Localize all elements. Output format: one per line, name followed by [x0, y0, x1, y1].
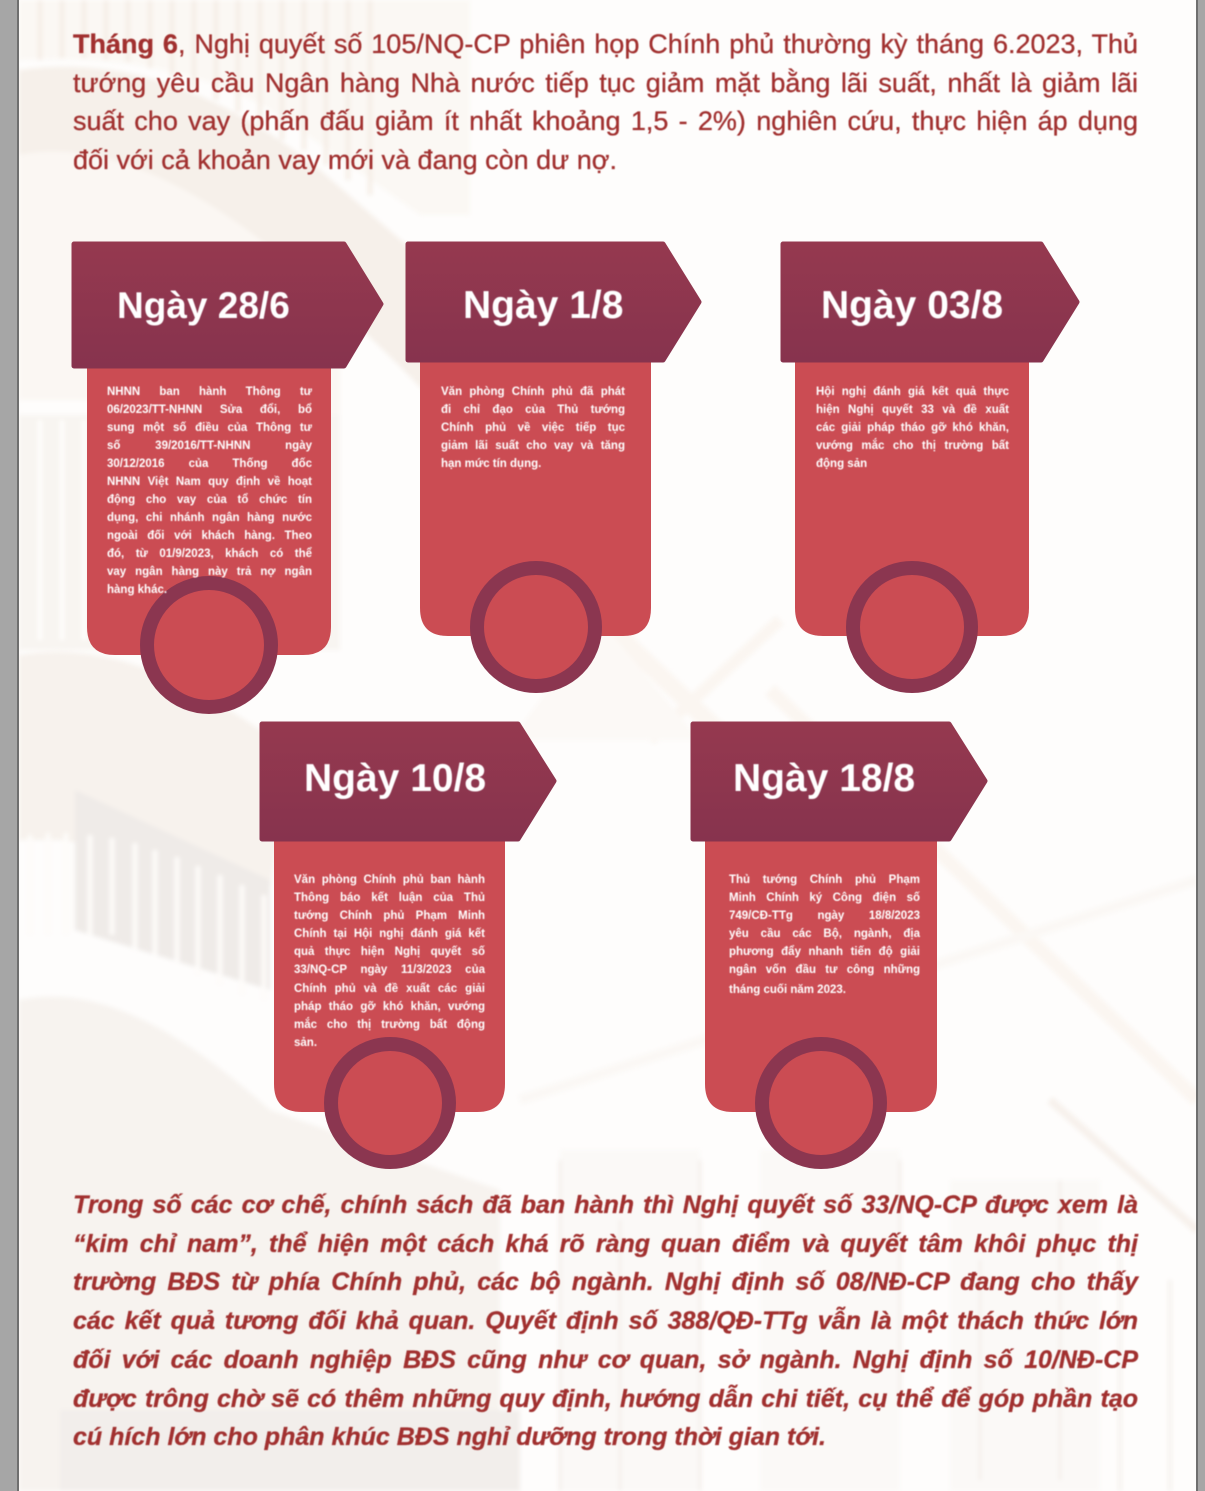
card text — [816, 385, 1010, 470]
closing paragraph — [72, 1191, 1140, 1451]
card: Ngày 10/8 — [260, 722, 556, 1169]
card text — [106, 385, 313, 596]
card text: NHNN ban hành Thông tư — [107, 386, 312, 398]
card text: tướng Chính phủ Phạm Minh — [294, 910, 485, 922]
card text: đó, từ 01/9/2023, khách có thể — [107, 548, 312, 560]
date heading: Ngày 18/8 — [733, 757, 915, 800]
card text: đi chỉ đạo của Thủ tướng — [441, 404, 625, 416]
card text: động sản — [816, 458, 867, 470]
intro paragraph: Tháng 6, Nghị quyết số 105/NQ-CP phiên họp Chính phủ thường kỳ tháng 6.2023, Thủ — [73, 29, 1138, 59]
card text — [293, 873, 486, 1049]
right-hand diagonal mouldings — [520, 560, 1197, 1100]
card text: Thủ tướng Chính phủ Phạm — [729, 874, 920, 886]
card text: Chính tại Hội nghị đánh giá kết — [294, 928, 485, 940]
card text: giảm lãi suất cho vay và tăng — [441, 440, 625, 452]
card text: 06/2023/TT-NHNN Sửa đổi, bổ — [107, 404, 312, 416]
card text: phương đẩy nhanh tiến độ giải — [729, 946, 920, 958]
card text: Chính phủ và đề xuất các giải — [294, 983, 485, 995]
card text: 749/CĐ-TTg ngày 18/8/2023 — [729, 910, 920, 922]
card text: Chính phủ về việc tiếp tục — [441, 422, 625, 434]
card text: Hội nghị đánh giá kết quả thực — [816, 386, 1009, 398]
card text: Minh Chính ký Công điện số — [729, 892, 920, 904]
date banner arrow — [262, 724, 554, 839]
date banner arrow — [693, 724, 985, 839]
date heading: Ngày 03/8 — [821, 284, 1003, 327]
decorative circle — [331, 1044, 449, 1162]
card text: sung một số điều của Thông tư — [107, 422, 312, 434]
card text: dụng, chi nhánh ngân hàng nước — [107, 512, 312, 524]
closing paragraph: các kết quả tương đối khả quan. Quyết định số 388/QĐ-TTg vẫn là một thách thức lớn — [73, 1307, 1138, 1335]
decorative circle — [762, 1044, 880, 1162]
card text: hiện Nghị quyết 33 và đề xuất — [816, 404, 1009, 416]
decorative circle — [853, 568, 971, 686]
intro paragraph — [72, 29, 1138, 176]
card text: số 39/2016/TT-NHNN ngày — [107, 440, 312, 452]
card body — [87, 361, 331, 655]
card text: hàng khác. — [107, 584, 167, 596]
date banner arrow — [74, 244, 381, 366]
closing paragraph: được trông chờ sẽ có thêm những quy định, hướng dẫn chi tiết, cụ thể để góp phần tạo — [73, 1385, 1138, 1413]
card body — [795, 356, 1029, 636]
card body — [705, 836, 937, 1112]
card text: quả thực hiện Nghị quyết số — [294, 946, 485, 958]
card text: hạn mức tín dụng. — [441, 458, 541, 470]
closing paragraph: trường BĐS từ phía Chính phủ, các bộ ngành. Nghị định số 08/NĐ-CP đang cho thấy — [73, 1268, 1138, 1296]
date heading: Ngày 28/6 — [117, 285, 290, 326]
card text: 33/NQ-CP ngày 11/3/2023 của — [294, 964, 485, 976]
intro paragraph: tướng yêu cầu Ngân hàng Nhà nước tiếp tục giảm mặt bằng lãi suất, nhất là giảm lãi — [73, 68, 1138, 98]
closing paragraph: cú hích lớn cho phân khúc BĐS nghỉ dưỡng trong thời gian tới. — [73, 1423, 826, 1451]
card text: Thông báo kết luận của Thủ — [294, 892, 485, 904]
lower balcony sweep — [19, 652, 290, 960]
card: Ngày 18/8 — [690, 722, 988, 1169]
closing paragraph: Trong số các cơ chế, chính sách đã ban hành thì Nghị quyết số 33/NQ-CP được xem là — [73, 1191, 1138, 1219]
closing paragraph: đối với các doanh nghiệp BĐS cũng như cơ quan, sở ngành. Nghị định số 10/NĐ-CP — [73, 1346, 1138, 1374]
card text: NHNN Việt Nam quy định về hoạt — [107, 476, 312, 488]
card text: ngoài đối với khách hàng. Theo — [107, 530, 312, 542]
intro paragraph: đối với cả khoản vay mới và đang còn dư nợ. — [73, 145, 617, 175]
card: Ngày 1/8 — [406, 242, 702, 693]
middle balcony — [19, 415, 340, 650]
lower right windows — [560, 1150, 1100, 1491]
card text: vướng mắc cho thị trường bất — [816, 440, 1009, 452]
card text: vay ngân hàng này trả nợ ngân — [107, 566, 312, 578]
card text: động cho vay của tổ chức tín — [107, 494, 312, 506]
card text: yêu cầu các Bộ, ngành, địa — [729, 928, 920, 940]
card text: Văn phòng Chính phủ đã phát — [441, 386, 625, 398]
decorative circle — [147, 583, 271, 707]
card body — [274, 836, 505, 1112]
card text: các giải pháp tháo gỡ khó khăn, — [816, 422, 1009, 434]
top-left building block — [19, 0, 470, 215]
date banner arrow — [783, 244, 1077, 360]
card: Ngày 03/8 — [780, 242, 1080, 693]
card text: sản. — [294, 1037, 317, 1049]
card text: mắc cho thị trường bất động — [294, 1019, 485, 1031]
card text: tháng cuối năm 2023. — [729, 984, 846, 996]
date heading: Ngày 1/8 — [463, 284, 623, 327]
card text: ngân vốn đầu tư công những — [729, 964, 920, 976]
date banner arrow — [408, 244, 699, 360]
decorative circle — [477, 568, 595, 686]
closing paragraph: “kim chỉ nam”, thể hiện một cách khá rõ ràng quan điểm và quyết tâm khôi phục thị — [73, 1230, 1138, 1258]
card text — [440, 385, 626, 470]
date heading: Ngày 10/8 — [304, 757, 486, 800]
card text: Văn phòng Chính phủ ban hành — [294, 874, 485, 886]
card text: pháp tháo gỡ khó khăn, vướng — [294, 1001, 485, 1013]
card: Ngày 28/6 — [72, 242, 384, 714]
intro paragraph: suất cho vay (phấn đấu giảm ít nhất khoảng 1,5 - 2%) nghiên cứu, thực hiện áp dụng — [73, 106, 1138, 136]
card body — [420, 356, 651, 636]
card text — [728, 873, 921, 996]
card text: 30/12/2016 của Thống đốc — [107, 458, 312, 470]
